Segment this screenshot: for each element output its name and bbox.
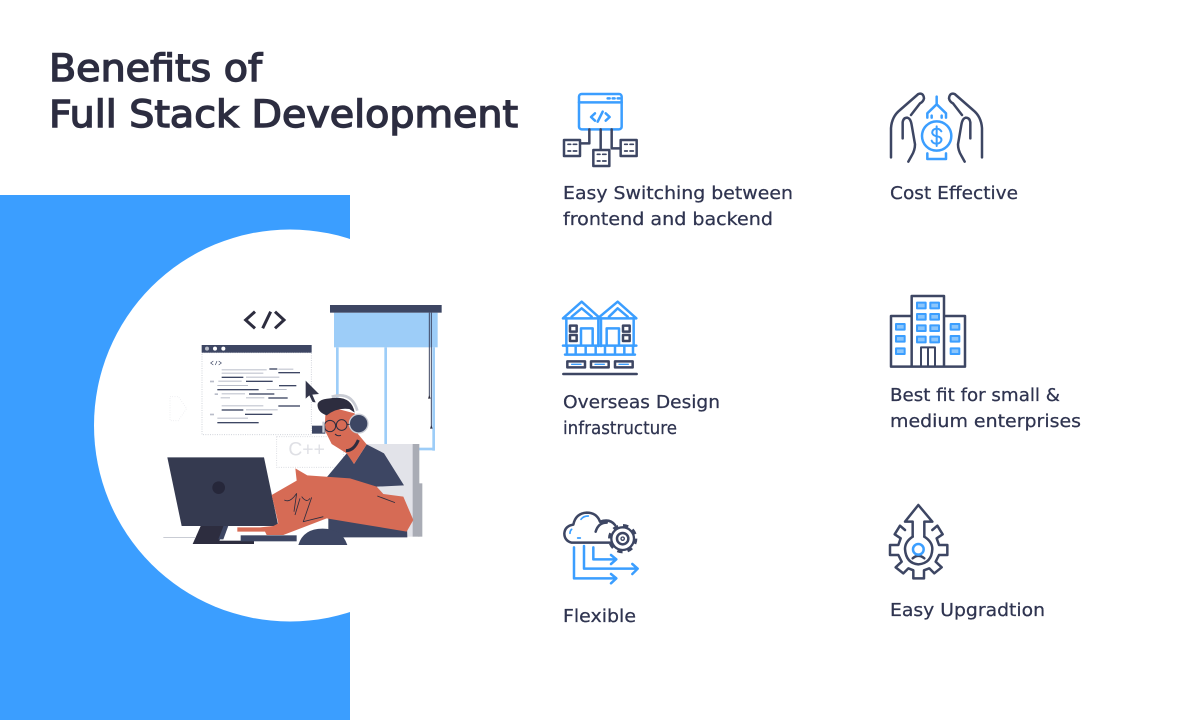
white circle (94, 230, 486, 622)
C++ card (277, 437, 343, 467)
benefit: easy switching: frontend and backend (563, 209, 773, 230)
icon: cloud, gear and arrows (564, 513, 638, 583)
code window (202, 345, 312, 435)
benefit: easy upgradation (890, 505, 1045, 621)
icon: gear with upward arrow (890, 505, 947, 578)
benefit: small and medium enterprises: medium enterprises (890, 411, 1081, 432)
desk, keyboard and mouse (163, 529, 347, 545)
label: Cost Effective (890, 183, 1018, 204)
icon: houses (563, 302, 637, 374)
icon: code window with linked modules (564, 94, 637, 166)
C++ card: C++ (288, 440, 325, 461)
blue background panel (0, 195, 350, 720)
benefit: flexible (563, 513, 638, 627)
monitor (167, 457, 278, 544)
benefit: easy switching (563, 94, 793, 230)
dotted play shape (170, 397, 187, 421)
benefit: overseas design (563, 302, 720, 439)
label: Easy Switching between (563, 183, 793, 204)
title: Full Stack Development (49, 93, 518, 136)
title: Benefits of (49, 47, 263, 90)
arm and hand (237, 468, 413, 535)
shirt (327, 444, 407, 537)
label: Flexible (563, 606, 636, 627)
cursor arrow (306, 381, 319, 402)
label: Overseas Design (563, 392, 720, 413)
label: Best fit for small & (890, 385, 1060, 406)
window blind and frame (330, 305, 442, 451)
benefit: cost effective (890, 94, 1018, 204)
icon: hands around coin (891, 94, 982, 162)
illustration: developer at computer (163, 305, 442, 545)
benefit: overseas design: infrastructure (563, 418, 677, 439)
chair (367, 444, 422, 537)
code symbol (246, 312, 284, 328)
label: Easy Upgradtion (890, 600, 1045, 621)
head and neck (312, 395, 368, 464)
title (49, 47, 518, 136)
icon: office building (891, 296, 965, 367)
benefit: small and medium enterprises (890, 296, 1081, 432)
